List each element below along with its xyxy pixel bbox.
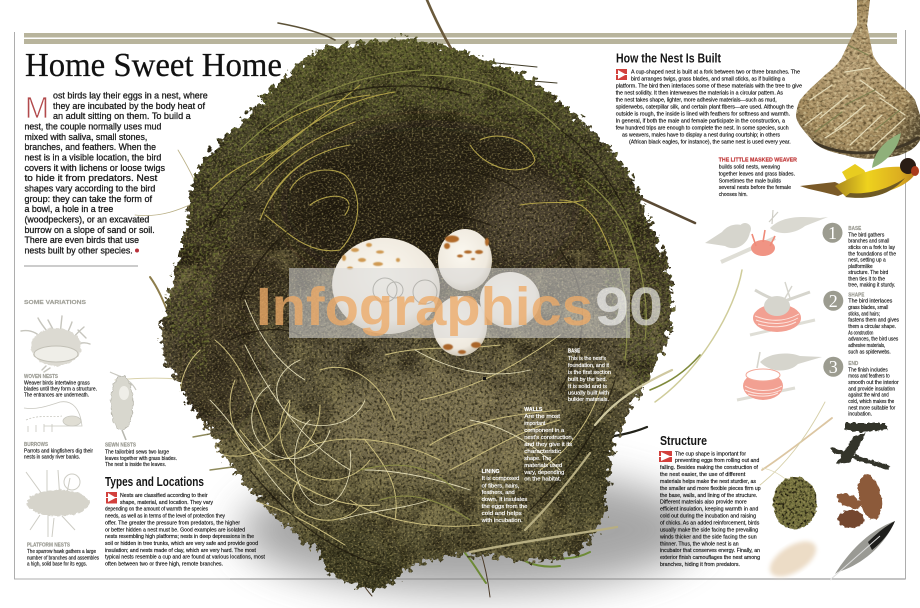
icon: red arrow (659, 451, 672, 462)
step 3 text: nest more suitable for (848, 405, 896, 411)
egg: large (326, 231, 446, 341)
marker dot on nest (483, 377, 486, 380)
step 2 text: fastens them and gives (848, 318, 899, 324)
sewn nests caption: The tailorbird sews two large (105, 450, 169, 456)
panel: structure: falling. Besides making the construction of (660, 465, 758, 471)
heading: Types and Locations (105, 475, 204, 489)
pale sticks over the nest (470, 370, 672, 552)
panel: structure: thinner. Thus, the whole nest is an (660, 541, 739, 547)
panel: how the nest is built: the nest takes shape, lighter, more adhesive materials—such as mud, (616, 98, 777, 104)
masked weaver caption: chooses him. (719, 192, 748, 198)
icon: platform nest (26, 470, 89, 537)
icon: number 3: 3 (829, 357, 838, 377)
label: lining (482, 469, 528, 524)
step 3 text (848, 361, 899, 418)
panel: structure: winds thicker and the side facing the sun (659, 534, 757, 540)
masked weaver caption: THE LITTLE MASKED WEAVER (719, 158, 797, 164)
burrows caption (24, 442, 93, 460)
step 2 text: adhesive materials, (848, 343, 885, 349)
panel: types and locations: depending on the amount of warmth the species (105, 507, 208, 513)
egg: right (480, 272, 540, 328)
label: walls: shape. The (524, 456, 551, 462)
icon: number 2 (823, 291, 843, 311)
label: lining: with incubation. (482, 518, 523, 524)
panel: types and locations: Nests are classified according to their (120, 493, 208, 499)
step 3 text: and provide insulation (848, 386, 895, 392)
panel: some variations (21, 300, 177, 568)
masked weaver caption (719, 158, 797, 198)
panel: how the nest is built: In general, if both the male and female participate in the construction, a (616, 118, 786, 124)
label: lining: It is composed (482, 476, 520, 482)
nest photo (115, 0, 742, 605)
panel: types and locations: offer. The greater the pressure from predators, the higher (105, 520, 240, 526)
eggs (326, 229, 540, 356)
icon: woven nest (21, 316, 90, 372)
label: walls (524, 407, 573, 482)
burrows caption: BURROWS (24, 442, 48, 448)
step 2 text: advances, the bird uses (848, 337, 899, 343)
watermark: 90 (595, 277, 663, 337)
step 3 text: moss and feathers to (848, 374, 890, 380)
panel: types and locations: nests resembling high platforms; nests in deep depressions in the (105, 534, 254, 540)
watermark (256, 268, 663, 338)
intro paragraph (24, 90, 208, 256)
masked weaver caption: together leaves and grass blades. (719, 171, 795, 177)
drop cap: M (25, 90, 49, 125)
step 1 text: branches and small (848, 239, 889, 245)
panel: types and locations: shape, material, and location. They vary (120, 500, 213, 506)
step 3 text: incubation. (848, 412, 872, 418)
panel: how the nest is built: A cup-shaped nest is built at a fork between two or three branches. The (631, 70, 800, 76)
platform nests caption: a high, solid base for its eggs. (27, 562, 87, 568)
hollow shading (280, 120, 580, 290)
green sprigs at bottom (330, 552, 590, 583)
intro paragraph: group: they can take the form of (24, 194, 152, 204)
step 3 text: smooth out the interior (848, 380, 899, 386)
panel: structure: of chicks. As an added reinforcement, birds (660, 520, 760, 526)
panel: structure: the smaller and more flexible pieces firm up (660, 486, 761, 492)
step 1 text: structure. The bird (848, 270, 888, 276)
intro paragraph: shapes vary according to the bird (24, 184, 155, 194)
label: base: usually built with (568, 390, 609, 396)
icon: sewn nest (110, 372, 136, 440)
step 1 text (848, 226, 896, 289)
woven nests caption: Weaver birds intertwine grass (24, 380, 90, 386)
material: moss (772, 476, 818, 530)
panel: how the nest is built: outside is rough, the inside is lined with feathers for softness and warmth. (616, 112, 790, 118)
step 3 illustration (737, 352, 822, 400)
woven nests caption: WOVEN NESTS (24, 374, 58, 380)
platform nests caption: PLATFORM NESTS (27, 542, 70, 548)
panel: structure (659, 434, 761, 568)
panel: structure: preventing eggs from rolling out and (675, 458, 759, 464)
icon: number 2: 2 (829, 291, 838, 311)
panel: how the nest is built: bird arranges twigs, grass blades, and small sticks, as if building a (631, 76, 786, 82)
label: walls: component in a (524, 428, 564, 434)
step 2 text: them a circular shape. (848, 324, 896, 330)
material: feather (830, 521, 895, 580)
sewn nests caption: The nest is inside the leaves. (105, 462, 166, 468)
step 2 text: grass blades, small (848, 305, 888, 311)
heading: Structure (660, 434, 707, 448)
label: walls: and they give it its (524, 442, 573, 448)
masked weaver caption: builds solid nests, weaving (719, 164, 780, 170)
burrows caption: nests in sandy river banks. (24, 454, 80, 460)
intro paragraph: (woodpeckers), or an excavated (24, 214, 149, 224)
label: base: built by the bird. (568, 377, 607, 383)
panel: types and locations (105, 475, 265, 568)
panel: structure: exterior finish camouflages the nest among (660, 555, 760, 561)
step 1 text: sticks on a fork to lay (848, 245, 895, 251)
panel: structure: the base, walls, and lining of the structure. (660, 493, 758, 499)
label: base: BASE (568, 348, 580, 354)
straw strands (210, 85, 610, 251)
hanging weaver nest (790, 0, 920, 165)
watermark: Infographics (256, 277, 593, 337)
intro paragraph: an adult sitting on them. To build a (53, 111, 192, 121)
material: bark (830, 423, 890, 470)
label: walls: nest's construction, (524, 435, 573, 441)
material: down fur (764, 534, 822, 584)
step 2 text: The bird interlaces (848, 299, 893, 305)
step 3 text: END (848, 361, 859, 367)
panel: nest labels (482, 348, 611, 524)
label: base: bulkier materials. (568, 397, 609, 403)
header bars (24, 33, 897, 44)
woven nests caption (24, 374, 97, 398)
egg: front (433, 296, 487, 356)
bird: masked weaver (800, 133, 919, 198)
step 2 text: such as spiderwebs. (848, 349, 891, 355)
intro paragraph: There are even birds that use (24, 235, 139, 245)
nest drop shadow (240, 468, 700, 592)
label: lining: down. It insulates (482, 497, 528, 503)
label: walls: WALLS (524, 407, 543, 413)
label: base (568, 348, 611, 403)
intro paragraph: they are incubated by the body heat of (53, 101, 205, 111)
step 2 illustration (750, 282, 815, 335)
twigs around nest (115, 0, 742, 597)
label: walls: Are the most (524, 414, 561, 420)
intro paragraph: covers it with lichens or loose twigs (24, 163, 165, 173)
intro paragraph: nests built by other species. (24, 246, 133, 256)
platform nests caption (27, 542, 99, 568)
panel: how the nest is built: spiderwebs, caterpillar silk, and certain plant fibers—are used. Although the (616, 104, 794, 110)
panel: how the nest is built: few hundred trips are enough to complete the nest. In some species, such (616, 126, 789, 132)
panel: types and locations: insulation; and nests made of clay, which are very hard. The most (105, 548, 256, 554)
intro paragraph: to hide it from predators. Nest (24, 173, 158, 183)
step 1 text: platformlike (848, 264, 873, 270)
platform nests caption: The sparrow hawk gathers a large (27, 549, 96, 555)
woven nests caption: blades until they form a structure. (24, 386, 97, 392)
panel: structure: The cup shape is important for (675, 451, 746, 457)
material: oak leaves (835, 472, 886, 528)
label: walls: materials used (524, 463, 562, 469)
title: Home Sweet Home (25, 47, 282, 84)
panel: types and locations: often between two or three high, remote branches. (105, 562, 223, 568)
step 2 text: As construction (848, 330, 873, 336)
step 3 text: The finish includes (848, 367, 888, 373)
masked weaver caption: Sometimes the male builds (719, 178, 781, 184)
leaf (872, 133, 901, 168)
panel: structure: branches, hiding it from predators. (660, 562, 740, 568)
label: walls: characteristic (524, 449, 561, 455)
icon: number 1: 1 (828, 223, 837, 243)
panel: structure: materials helps make the nest sturdier, as (660, 479, 756, 485)
panel: structure: incubator that conserves energy. Finally, an (660, 548, 760, 554)
platform nests caption: number of branches and assembles (27, 556, 99, 562)
label: lining: LINING (482, 469, 500, 475)
masked weaver caption: several nests before the female (719, 185, 791, 191)
label: lining: feathers, and (482, 490, 515, 496)
intro paragraph: a bowl, a hole in a tree (24, 204, 113, 214)
step 2 text: sticks, and hairs; (848, 311, 880, 317)
sewn nests caption: leaves together with grass blades. (105, 456, 177, 462)
panel: types and locations: soil or hidden in tree trunks, which are very safe and provide good (105, 541, 258, 547)
woven nests caption: The entrances are underneath. (24, 392, 89, 398)
step 1 text: The bird gathers (848, 232, 885, 238)
panel: structure: cold out during the incubation and raising (660, 514, 756, 520)
nest texture layers (150, 30, 680, 595)
label: base: This is the nest's (568, 356, 606, 362)
label: lining: the eggs from the (482, 504, 528, 510)
panel: structure: Different materials also provide more (660, 500, 747, 506)
intro paragraph: mixed with saliva, small stones, (24, 132, 147, 142)
heading: How the Nest Is Built (616, 52, 722, 66)
label: base: is the first section (568, 370, 611, 376)
intro paragraph: burrow on a slope of sand or soil. (24, 225, 155, 235)
variations heading: SOME VARIATIONS (24, 300, 86, 306)
panel: structure: usually make the side facing the prevailing (660, 527, 758, 533)
panel: types and locations: typical nests resemble a cup and are found at various locations, most (105, 555, 265, 561)
icon: red arrow (616, 69, 627, 80)
sewn nests caption: SEWN NESTS (105, 442, 136, 448)
panel: types and locations: needs, as well as in terms of the level of protection they (105, 514, 225, 520)
mottled tone patches (150, 30, 680, 595)
step 1 text: nest, setting up a (848, 258, 886, 264)
nest materials (760, 402, 895, 584)
label: base: It is solid and is (568, 384, 607, 390)
step 3 text: cold, which makes the (848, 399, 894, 405)
nest body (158, 33, 676, 593)
panel: structure: the nest easier, the use of different (660, 472, 746, 478)
egg: top (438, 229, 492, 291)
label: lining: of fibers, hairs, (482, 484, 519, 490)
label: base: foundation, and it (568, 363, 610, 369)
step 2 text (848, 292, 899, 355)
label: walls: vary, depending (524, 470, 564, 476)
icon: number 1 (822, 223, 842, 243)
end mark (135, 248, 139, 252)
panel: how the nest is built (616, 52, 802, 146)
label: lining: cold and helps (482, 511, 522, 517)
material: straw (760, 402, 832, 485)
step 1 text: the foundations of the (848, 251, 896, 257)
step 1 illustration (705, 210, 828, 262)
label: walls: important (524, 421, 546, 427)
icon: number 3 (823, 357, 843, 377)
panel: how the nest is built: as weavers, males have to display a nest during courtship; in others (622, 132, 780, 138)
intro paragraph: nest, the couple normally uses mud (24, 122, 161, 132)
panel: how the nest is built: platform. The bird then interlaces some of these materials with the tree to give (616, 84, 802, 90)
intro paragraph: ost birds lay their eggs in a nest, where (53, 90, 208, 100)
icon: burrow (24, 402, 82, 432)
intro paragraph: branches, and feathers. When the (24, 142, 156, 152)
panel: how the nest is built: the nest solidity. It then interweaves the materials in a circular pattern. As (616, 90, 783, 96)
step 1 text: BASE (848, 226, 862, 232)
label: walls: on the habitat. (524, 476, 561, 482)
frame line over shadow (230, 578, 905, 580)
icon: red arrow (106, 492, 117, 504)
sewn nests caption (105, 442, 177, 468)
step 2 text: SHAPE (848, 292, 865, 298)
panel: structure: efficient insulation, keeping warmth in and (660, 507, 758, 513)
panel: how the nest is built: (African black eagles, for instance), the same nest is used every year. (629, 140, 791, 146)
step 1 text: tree, making it sturdy. (848, 283, 895, 289)
intro paragraph: nest is in a visible location, the bird (24, 152, 161, 162)
step 1 text: then ties it to the (848, 276, 885, 282)
panel: types and locations: or better hidden a nest must be. Good examples are isolated (105, 527, 245, 533)
burrows caption: Parrots and kingfishers dig their (24, 448, 93, 454)
step 3 text: against the wind and (848, 393, 889, 399)
